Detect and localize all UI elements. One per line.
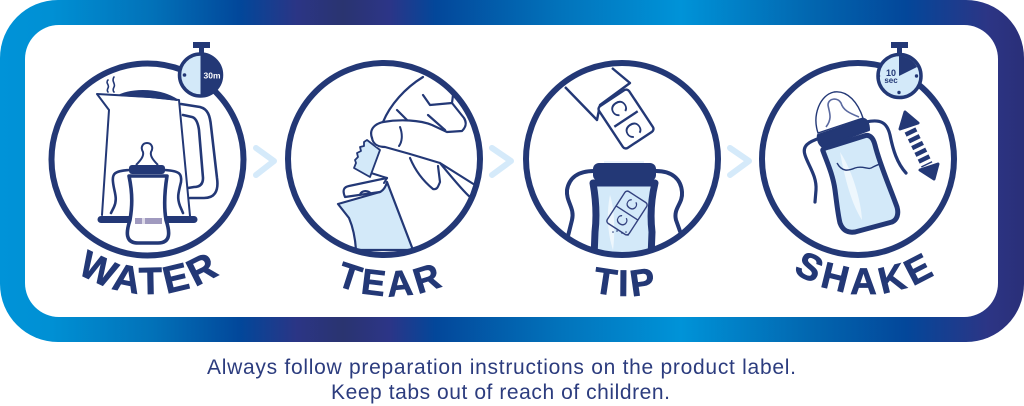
icon: 30 minute timer (180, 42, 222, 96)
chevron arrow: tear to tip (492, 148, 511, 175)
label: TEAR: TEAR (342, 261, 443, 298)
shake circle (762, 63, 954, 255)
icon: torn strip (354, 140, 380, 177)
icon: dissolving tab (606, 190, 648, 236)
icon: bottle under tab (567, 161, 682, 258)
icon: dissolving tab: C (612, 212, 633, 230)
water circle (52, 64, 244, 256)
footer line one: Always follow preparation instructions on the product label. (207, 356, 796, 379)
panel: water step (48, 42, 246, 294)
icon: dissolving tab: C (622, 196, 642, 214)
icon: sachet (338, 173, 413, 250)
timer label: 30m (203, 70, 221, 80)
icon: hand (370, 76, 474, 198)
icon: falling tab (597, 88, 655, 150)
icon: 10 second timer (877, 42, 921, 98)
timer label: 10 (886, 68, 896, 78)
white inner panel (25, 25, 998, 317)
panel: tear step (285, 60, 483, 298)
icon: falling tab: C (618, 116, 648, 143)
label: TIP: TIP (596, 266, 653, 296)
label: WATER: WATER (82, 249, 220, 294)
icon: sachet pouring (565, 68, 630, 120)
icon: shake double arrow (900, 112, 938, 179)
icon: bottle in kettle (111, 143, 183, 243)
tear circle (288, 63, 480, 255)
tip circle (526, 63, 718, 255)
panel: shake step (759, 42, 957, 294)
chevron arrow: tip to shake (730, 148, 749, 175)
timer label (884, 68, 898, 85)
label: SHAKE: SHAKE (796, 252, 934, 294)
icon: tilted bottle (804, 92, 906, 232)
panel: tip step (523, 60, 721, 296)
footer note (207, 356, 796, 404)
footer line two: Keep tabs out of reach of children. (331, 381, 670, 404)
timer label: sec (884, 76, 898, 85)
icon: falling tab: C (604, 95, 634, 122)
chevron arrow: water to tear (256, 148, 274, 175)
icon: bubbles (612, 230, 629, 236)
icon: kettle (97, 91, 217, 220)
icon: steam (107, 77, 114, 92)
